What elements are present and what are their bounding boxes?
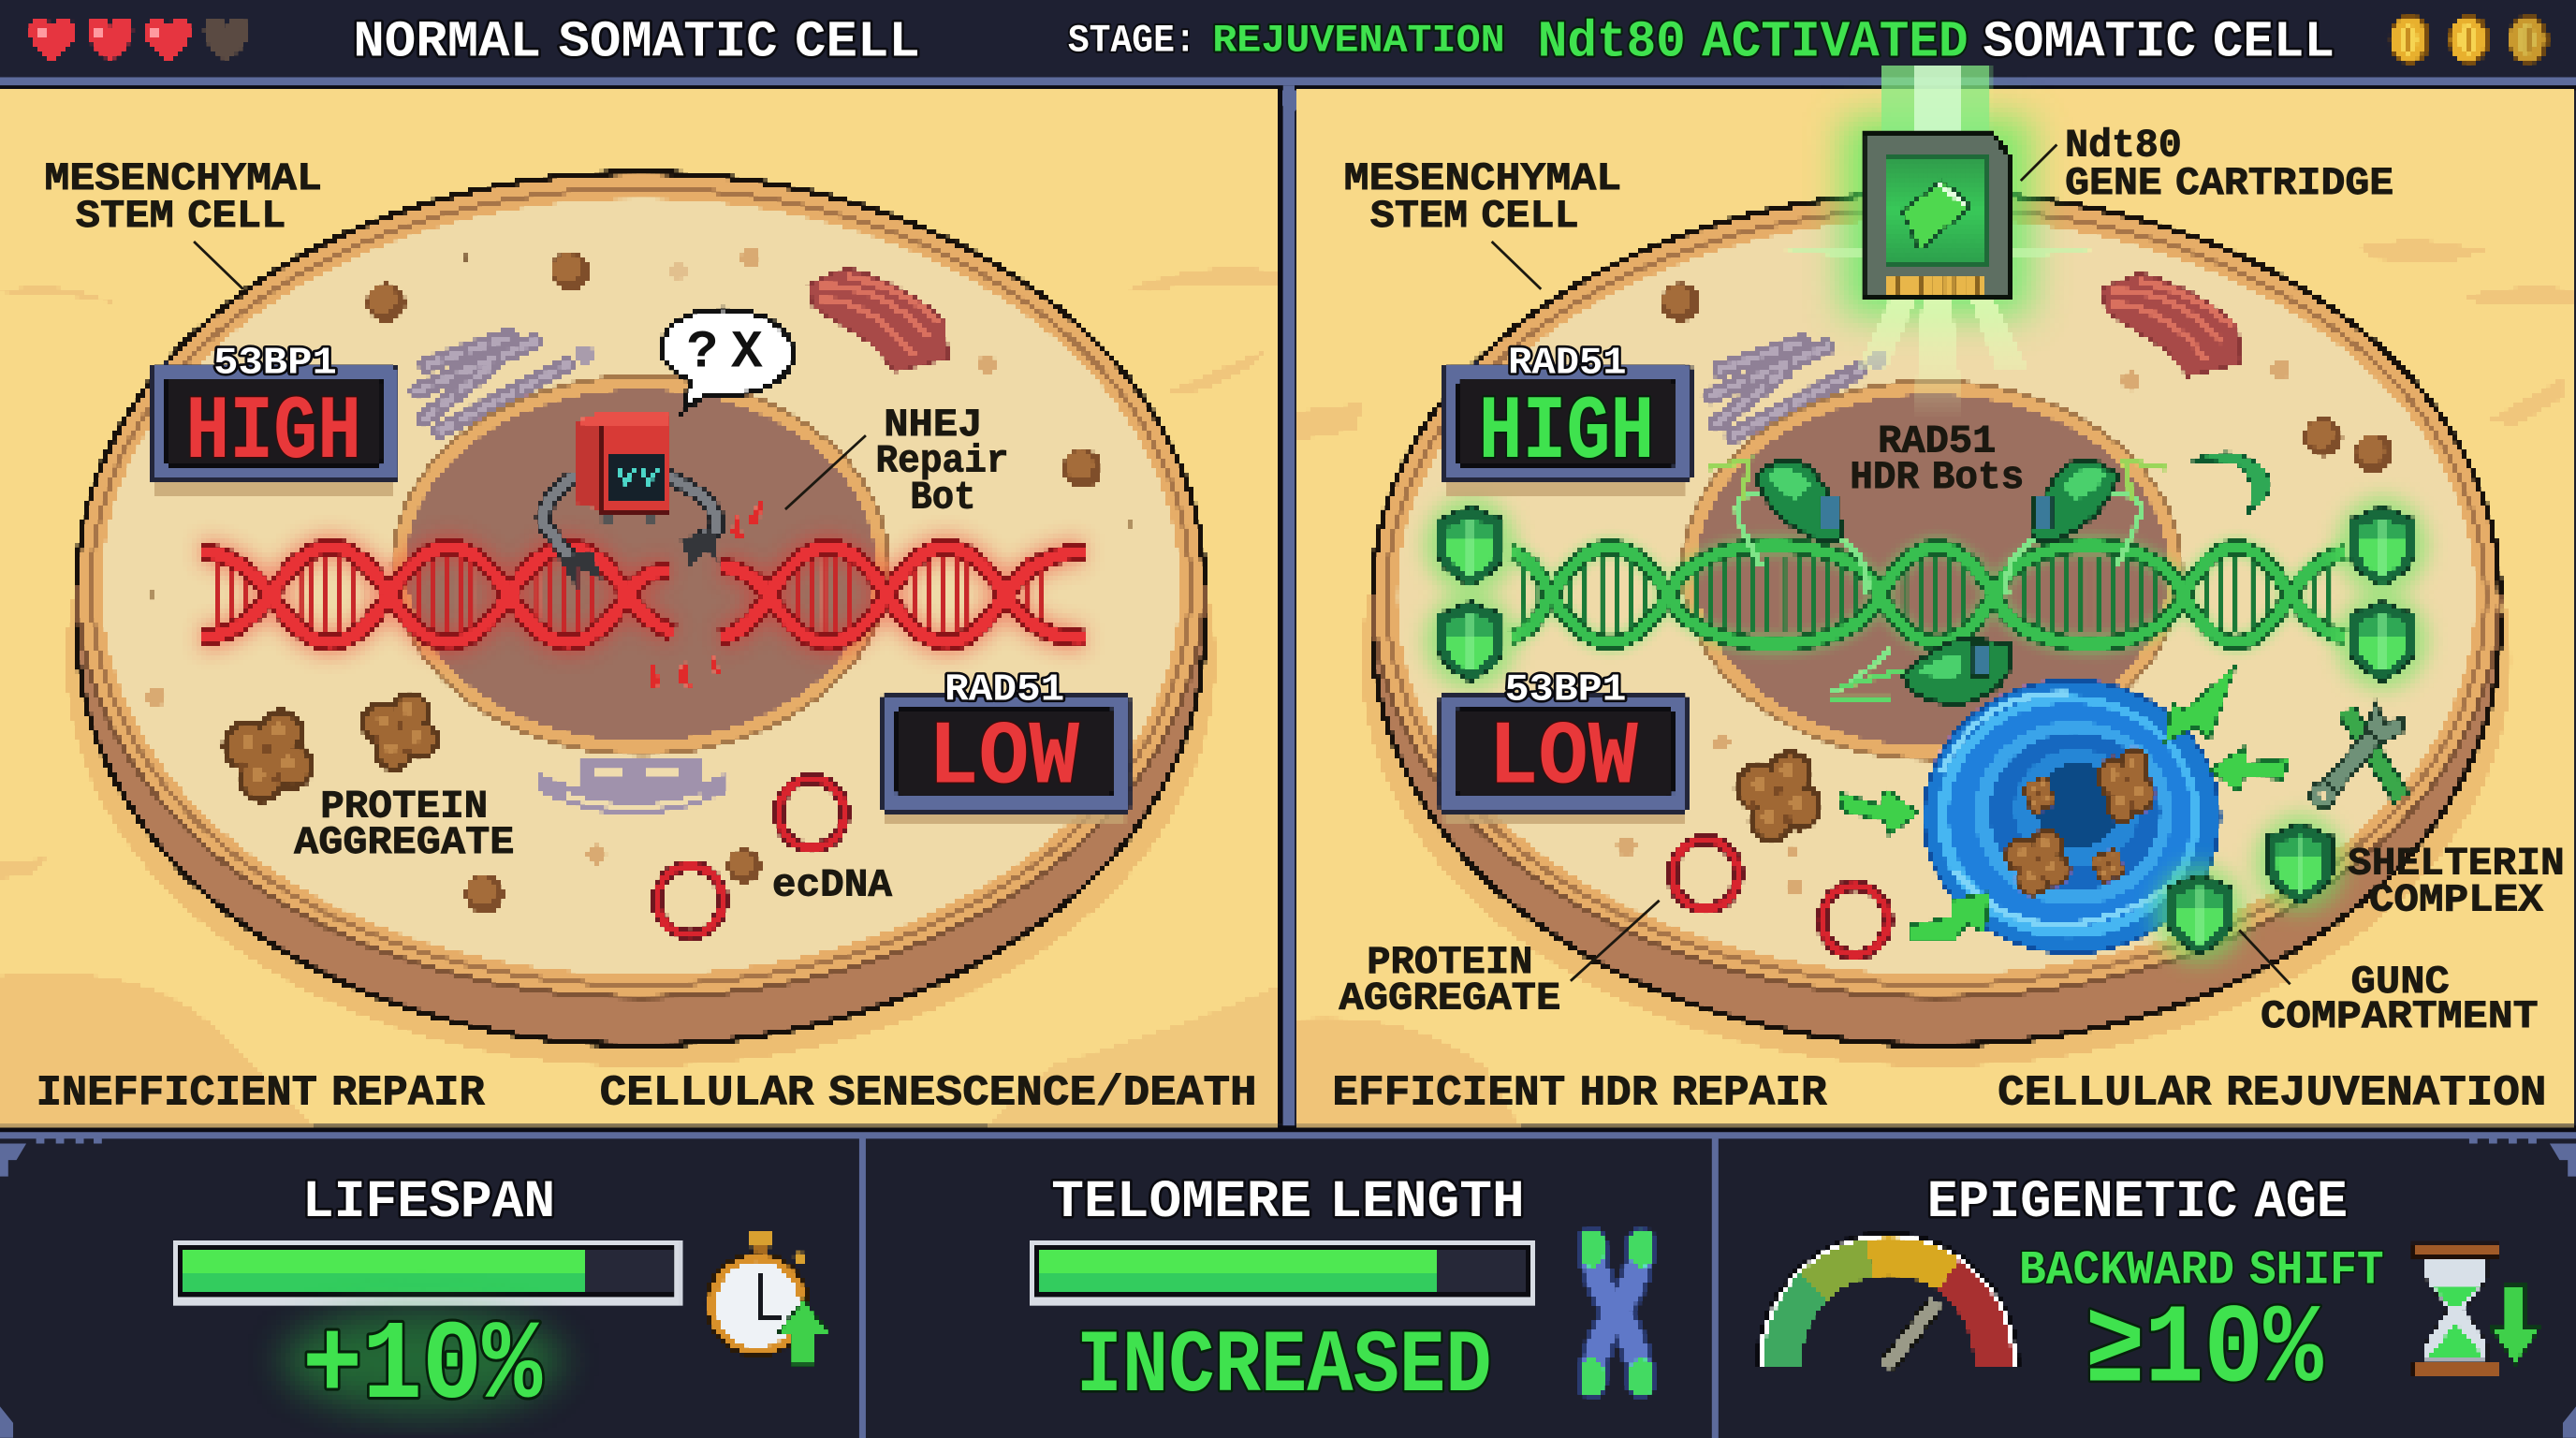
label: protein aggregate: AGGREGATE — [294, 820, 514, 865]
heading: Ndt80 activated: Ndt80 ACTIVATED — [1538, 15, 1969, 72]
speech bubble — [662, 309, 794, 411]
nucleus — [1682, 381, 2182, 759]
cell artwork — [1298, 66, 2576, 1125]
title: lifespan: LIFESPAN — [302, 1172, 555, 1232]
panel: lifespan — [174, 1172, 829, 1431]
label: shelterin complex — [2348, 842, 2565, 922]
panel frames — [0, 77, 2576, 1138]
cytoplasm granules — [146, 248, 1134, 914]
speech bubble glyphs — [687, 322, 763, 382]
label: RAD51 HDR bots: RAD51 — [1878, 419, 1996, 464]
chip label RAD51: RAD51 — [944, 669, 1064, 712]
bottom dashboard — [0, 1134, 2576, 1438]
speech bubble glyphs: ? — [687, 322, 718, 382]
label: RAD51 HDR bots — [1850, 419, 2024, 500]
panel: epigenetic age — [1761, 1172, 2539, 1414]
title: epigenetic age: EPIGENETIC AGE — [1927, 1172, 2348, 1232]
status bar text — [353, 15, 2334, 72]
LOW readout: LOW — [1488, 707, 1638, 809]
value: increased: INCREASED — [1076, 1317, 1492, 1417]
caption: efficient HDR repair: EFFICIENT HDR REPAIR — [1332, 1068, 1827, 1117]
label: mesenchymal stem cell — [44, 156, 322, 289]
mitochondrion and golgi — [1710, 272, 2241, 435]
label: GUNC compartment — [2239, 930, 2539, 1039]
chip label 53BP1: 53BP1 — [213, 342, 337, 385]
endoplasmic reticulum — [539, 757, 728, 815]
chip: 53BP1 high — [151, 365, 398, 494]
telomere art — [1032, 1240, 1641, 1386]
value: at least 10%: ≥10% — [2085, 1287, 2323, 1414]
free protein aggregate — [1734, 749, 1822, 844]
label: protein aggregate: PROTEIN — [320, 784, 488, 829]
caption: inefficient repair: INEFFICIENT REPAIR — [37, 1068, 485, 1117]
dashboard dividers and corners — [0, 1134, 2576, 1438]
stage label: STAGE: — [1068, 18, 1196, 63]
label: NHEJ repair bot: Repair — [875, 439, 1009, 484]
RAD51 HDR bots — [1708, 453, 2271, 704]
panel: Ndt80 activated somatic cell — [1298, 66, 2576, 1125]
label: protein aggregate: AGGREGATE — [1339, 976, 1560, 1021]
green repaired DNA helix — [1512, 546, 2346, 644]
top status bar — [0, 0, 2576, 79]
shields: telomere caps — [1425, 496, 2428, 690]
label: mesenchymal stem cell: MESENCHYMAL — [1344, 156, 1621, 201]
telomere bar — [1032, 1242, 1533, 1301]
icon: stopwatch — [707, 1232, 829, 1365]
HIGH readout: HIGH — [185, 382, 361, 484]
NHEJ repair bot — [544, 413, 720, 592]
caption: cellular rejuvenation: CELLULAR REJUVENATION — [1998, 1068, 2546, 1117]
heading: normal somatic cell: NORMAL SOMATIC CELL — [353, 15, 920, 72]
broken red DNA helix — [200, 500, 1084, 690]
label: mesenchymal stem cell: STEM CELL — [1370, 194, 1579, 239]
telomere text — [1051, 1172, 1525, 1417]
+10% glow — [283, 1312, 562, 1410]
HIGH readout: HIGH — [1479, 382, 1654, 484]
ecDNA rings — [657, 779, 844, 935]
LOW readout: LOW — [929, 707, 1079, 809]
cell body — [1361, 192, 2511, 1066]
title: telomere length: TELOMERE LENGTH — [1051, 1172, 1525, 1232]
nucleus — [392, 376, 889, 755]
chip label 53BP1: 53BP1 — [1505, 669, 1627, 712]
stage value: REJUVENATION — [1212, 18, 1505, 63]
chip: RAD51 low — [882, 695, 1129, 825]
GUNC compartment vortex — [1924, 681, 2219, 953]
cytoplasm granules — [1617, 283, 2393, 896]
label: NHEJ repair bot: Bot — [910, 475, 976, 520]
chip: 53BP1 low — [1441, 695, 1687, 825]
icons: hearts and coins — [30, 15, 2549, 64]
panel: telomere length — [1032, 1172, 1641, 1417]
label: protein aggregate — [1339, 901, 1660, 1021]
icon: chromosome — [1592, 1240, 1641, 1386]
caption: senescence: CELLULAR SENESCENCE/DEATH — [600, 1068, 1257, 1117]
label: Ndt80 gene cartridge: GENE CARTRIDGE — [2065, 161, 2393, 206]
label: shelterin complex: COMPLEX — [2369, 877, 2544, 922]
value: +10%: +10% — [302, 1304, 543, 1431]
label: NHEJ repair bot: NHEJ — [884, 403, 983, 448]
lifespan text — [302, 1172, 555, 1431]
protein aggregates — [222, 691, 440, 803]
label: RAD51 HDR bots: HDR Bots — [1850, 455, 2024, 500]
green arrows into vortex — [1838, 666, 2289, 940]
label: GUNC compartment: GUNC — [2351, 960, 2450, 1005]
speech bubble glyphs: X — [731, 322, 763, 382]
label: GUNC compartment: COMPARTMENT — [2261, 994, 2539, 1039]
shields: shelterin complex — [2154, 814, 2346, 962]
label: backward shift: BACKWARD SHIFT — [2019, 1245, 2384, 1299]
left panel labels — [37, 156, 1257, 1117]
label: protein aggregate — [294, 784, 514, 865]
right panel labels — [1332, 124, 2565, 1117]
lifespan art — [174, 1232, 829, 1410]
panel: normal somatic cell — [0, 91, 1281, 1125]
label: Ndt80 gene cartridge: Ndt80 — [2065, 124, 2182, 169]
label: shelterin complex: SHELTERIN — [2348, 842, 2565, 887]
label: mesenchymal stem cell: STEM CELL — [76, 194, 285, 239]
label: Ndt80 gene cartridge — [2021, 124, 2393, 206]
heading: somatic cell: SOMATIC CELL — [1983, 15, 2334, 72]
icon: age gauge — [1761, 1238, 2014, 1367]
lifespan bar — [174, 1242, 679, 1301]
cell body — [66, 172, 1216, 1066]
epigenetic art — [1761, 1238, 2539, 1375]
glowing gene cartridge — [1782, 66, 2095, 419]
icon: hourglass — [2413, 1244, 2539, 1375]
ecDNA rings — [1673, 840, 1888, 955]
chip label RAD51: RAD51 — [1508, 342, 1627, 385]
label: NHEJ repair bot — [785, 403, 1009, 520]
label: protein aggregate: PROTEIN — [1367, 940, 1533, 985]
label: mesenchymal stem cell: MESENCHYMAL — [44, 156, 322, 201]
cell artwork — [0, 91, 1281, 1125]
chip: RAD51 high — [1444, 365, 1690, 494]
epigenetic text — [1927, 1172, 2384, 1414]
mitochondrion and golgi — [417, 268, 948, 431]
wrench and screwdriver — [2310, 703, 2405, 809]
label: mesenchymal stem cell — [1344, 156, 1621, 289]
label: ecDNA: ecDNA — [772, 863, 893, 908]
